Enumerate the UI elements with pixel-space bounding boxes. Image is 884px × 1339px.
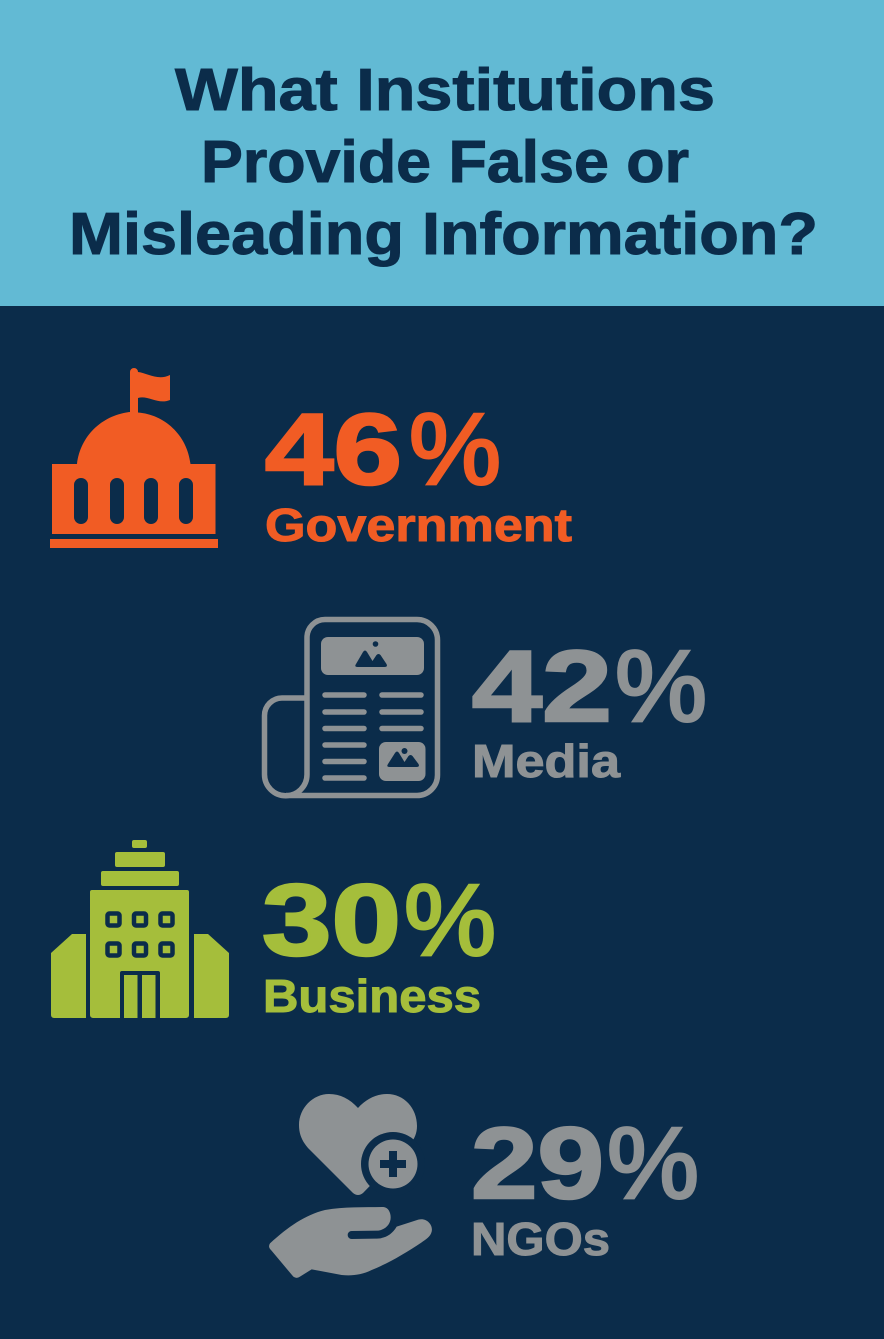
stat: government [50, 368, 572, 551]
value: 29%: % [607, 1108, 699, 1220]
icon: newspaper [264, 620, 438, 796]
title: Misleading Information? [69, 201, 818, 267]
value: 30%: 30 [262, 865, 401, 977]
title: What Institutions [175, 57, 715, 123]
header panel [0, 0, 884, 306]
value: 30%: % [404, 865, 496, 977]
value: 42%: % [615, 631, 707, 743]
title: Provide False or [201, 129, 689, 195]
label: Government: Government [265, 499, 572, 551]
stat: media [264, 620, 707, 796]
icon: office building [51, 840, 229, 1018]
value: 46%: 46 [265, 394, 402, 506]
label: NGOs: NGOs [471, 1213, 610, 1265]
stat: ngos [269, 1094, 699, 1278]
label: Business: Business [263, 970, 481, 1022]
stat: business [51, 840, 496, 1022]
value: 42%: 42 [472, 631, 612, 743]
value: 29%: 29 [471, 1108, 604, 1220]
value: 46%: % [409, 394, 501, 506]
title [69, 57, 818, 267]
icon: hand holding heart [269, 1094, 432, 1278]
label: Media: Media [472, 735, 620, 787]
icon: capitol building [50, 368, 218, 548]
